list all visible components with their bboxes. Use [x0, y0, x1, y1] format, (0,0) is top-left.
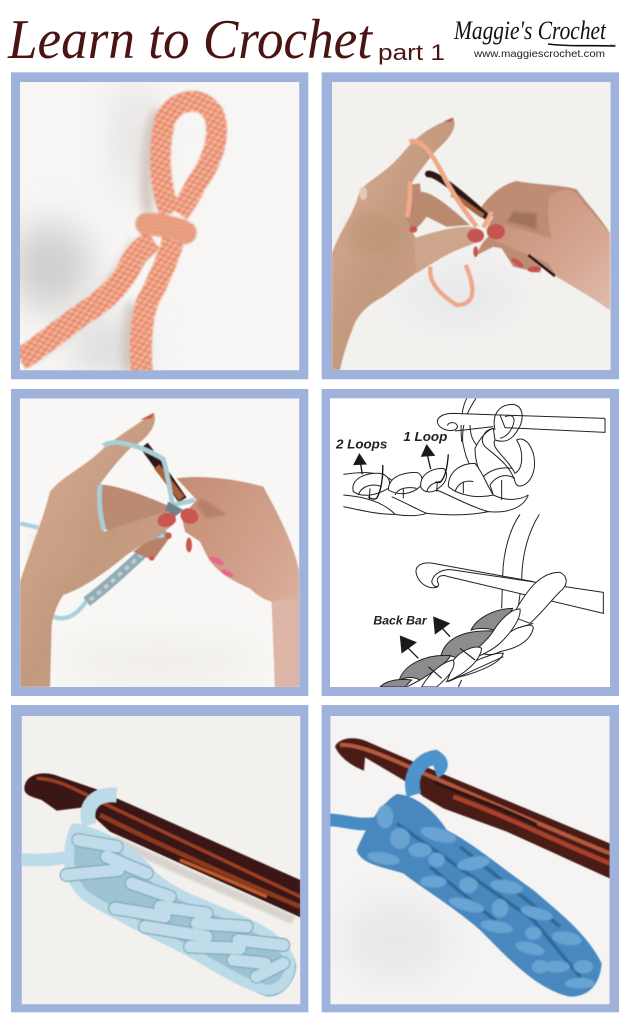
hand: left palm and index finger [332, 118, 455, 370]
icon: crochet hook [144, 446, 183, 500]
rope: lower left strand [20, 240, 153, 360]
nails [140, 413, 200, 561]
rope: knot [147, 224, 185, 233]
yarn: tail [330, 820, 375, 824]
label: Back Bar: Back Bar [373, 615, 428, 628]
icon: black marker loops [368, 454, 448, 499]
logo: Maggie's Crochet: TM [610, 43, 616, 48]
icon: loose peach yarn end [430, 265, 472, 305]
hand: left palm, index finger and thumb [20, 413, 176, 687]
arrow: back bar 2 [433, 617, 450, 637]
logo: Maggie's Crochet [453, 16, 616, 60]
icon: peach yarn over finger [407, 141, 492, 227]
icon: crochet hook [24, 773, 300, 917]
rope shadow [30, 110, 160, 372]
yarn: cross strands [67, 840, 283, 977]
yarn: chain body [66, 825, 295, 995]
icon: yarn over finger [99, 443, 195, 530]
panel: slip knot photo [10, 72, 308, 379]
hand: left middle finger [97, 484, 168, 532]
icon: crochet hook [335, 738, 610, 878]
rope: lower right strand [141, 240, 173, 372]
diagram: chain with hook [343, 398, 605, 516]
label: 1 Loop: 1 Loop [403, 430, 448, 444]
yarn: outline of chain [69, 828, 290, 990]
title: Learn to Crochet [7, 9, 373, 71]
icon: blue yarn tail [20, 523, 87, 618]
hand: right [176, 476, 300, 604]
panel: blue yarn chain on hook [322, 705, 619, 1012]
nails [409, 117, 541, 272]
hand: right [477, 180, 610, 278]
diagram: back bar chain [380, 514, 603, 687]
yarn: stitches [366, 805, 595, 989]
subtitle: part 1: part 1 [378, 40, 445, 65]
yarn: tail and ring [22, 857, 65, 860]
arrow: 2 loops [353, 453, 367, 474]
hand: left thumb [413, 227, 484, 273]
arrow: 1 loop [421, 444, 435, 469]
label: 2 Loops: 2 Loops [335, 437, 387, 451]
yarn: ring over hook [412, 757, 440, 795]
panel: hands working chain [11, 389, 308, 696]
hook shadow [113, 840, 293, 920]
yarn: chain body [357, 794, 602, 997]
hand: left middle fingers [403, 183, 470, 233]
panel: stitch diagrams [322, 389, 619, 696]
icon: crochet hook [428, 174, 555, 276]
rope: loop [160, 101, 217, 213]
logo: Maggie's Crochet: Maggie's Crochet [453, 16, 607, 45]
panel: light blue chain on hook [11, 705, 308, 1012]
arrow: back bar 1 [400, 636, 418, 658]
logo: Maggie's Crochet: www.maggiescrochet.com [473, 48, 605, 60]
chain [87, 532, 167, 602]
panel: hands starting a chain [322, 72, 619, 379]
